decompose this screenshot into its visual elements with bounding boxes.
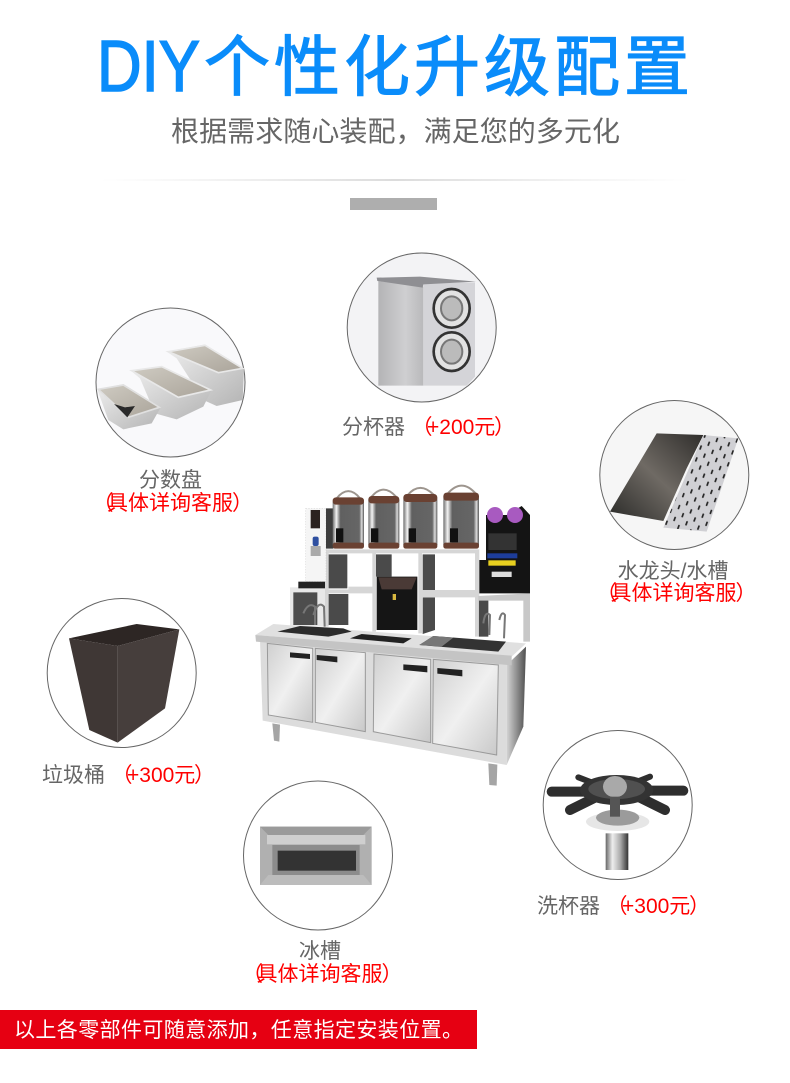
sinks [277, 626, 506, 652]
price note: （ [596, 582, 617, 605]
footer banner: 以上各零部件可随意添加，任意指定安装位置。 [14, 1019, 463, 1042]
circle [96, 308, 245, 457]
price: （ [412, 416, 432, 439]
price note: ） [736, 582, 756, 605]
item: trash can [42, 598, 215, 787]
price: （ [606, 895, 628, 918]
caption: 分数盘 [139, 469, 202, 492]
circle [543, 730, 692, 880]
upper shelf frame [325, 549, 479, 637]
price: ） [689, 895, 710, 918]
item: GN pans [92, 308, 253, 515]
circle [244, 781, 392, 930]
center dispensing machine [377, 577, 417, 630]
central product: stainless tea station [255, 486, 530, 786]
right low shelf [478, 593, 530, 642]
price note: ） [232, 492, 253, 515]
bin [69, 624, 179, 743]
circle [347, 253, 496, 402]
pans [97, 344, 244, 429]
legs [272, 723, 497, 786]
sink and drain plate [610, 433, 738, 532]
item: faucet and sink [596, 400, 756, 605]
caption: 冰槽 [299, 940, 341, 963]
sealing machine [479, 506, 530, 593]
price: +300元 [622, 895, 690, 918]
counter top [255, 624, 526, 657]
price note: 具体详询客服 [256, 963, 382, 986]
faucets [303, 605, 505, 638]
price: +200元 [427, 416, 495, 439]
washer [552, 775, 683, 870]
tea buckets [333, 486, 479, 549]
cabinet doors [267, 643, 498, 755]
price: （ [112, 764, 132, 787]
caption: 水龙头/水槽 [618, 560, 728, 583]
item: cup washer [537, 730, 710, 918]
ice tray [260, 827, 372, 885]
hot water dispenser [298, 508, 333, 588]
caption: 分杯器 [342, 416, 405, 439]
subtitle: 根据需求随心装配，满足您的多元化 [171, 116, 620, 147]
caption: 垃圾桶 [42, 764, 105, 787]
title: 个性化升级配置 [204, 30, 690, 104]
item: cup dispenser [342, 253, 515, 439]
footer banner [0, 1010, 477, 1049]
door handles [290, 652, 462, 676]
price note: ） [382, 963, 402, 986]
left low shelf [290, 587, 325, 627]
price: +300元 [127, 764, 195, 787]
grey accent bar [350, 198, 437, 210]
price note: （ [242, 963, 263, 986]
circle [600, 400, 749, 550]
price note: 具体详询客服 [610, 582, 736, 605]
caption: 洗杯器 [537, 895, 600, 918]
price: ） [194, 764, 215, 787]
cabinet body [260, 640, 507, 765]
circle [47, 598, 196, 748]
dispenser [377, 277, 476, 386]
price note: （ [92, 492, 114, 515]
item: ice well [242, 781, 402, 986]
price note: 具体详询客服 [107, 492, 233, 515]
price: ） [494, 416, 515, 439]
title: DIY [97, 27, 200, 107]
